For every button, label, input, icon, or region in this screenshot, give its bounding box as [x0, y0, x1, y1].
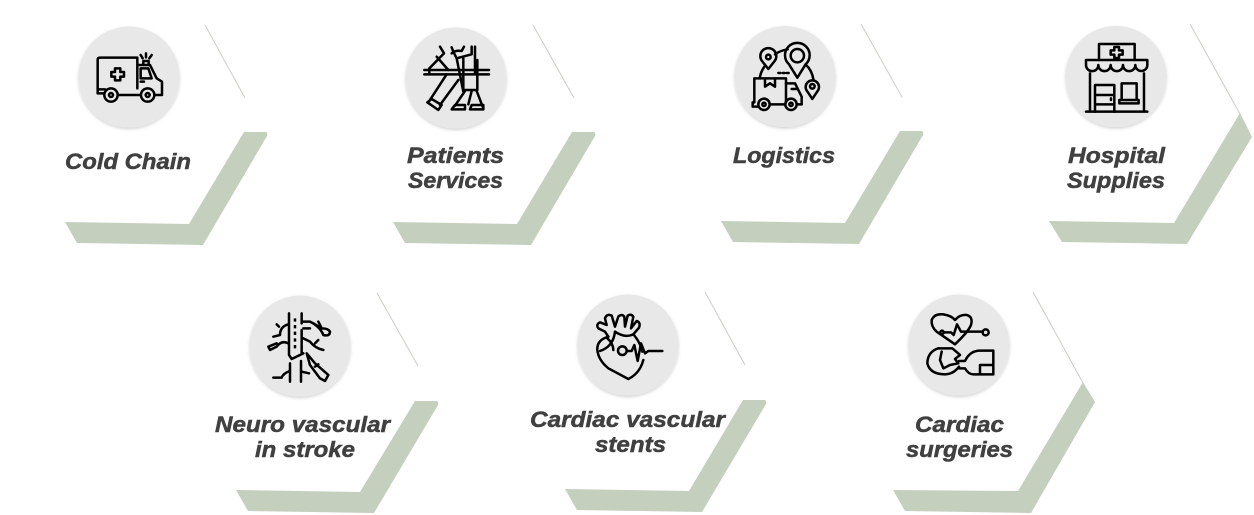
heading: hospital supplies: Supplies: [1067, 168, 1165, 193]
panel: cardiac vascular stents: [530, 292, 766, 512]
green chevron: [721, 131, 923, 244]
heading: cardiac surgeries: [906, 412, 1013, 462]
icon circle: [406, 28, 506, 128]
icon circle: [734, 26, 836, 127]
icon: heart with stent and ecg: [597, 315, 662, 379]
thin chevron line: [705, 292, 745, 365]
heading: neuro vascular in stroke: Neuro vascular: [215, 412, 392, 437]
green chevron: [65, 132, 267, 245]
heading: patients services: [407, 143, 504, 193]
heading: hospital supplies: [1067, 143, 1166, 193]
green chevron arrow: [1049, 113, 1252, 244]
icon: blood vessels and scalpel: [268, 313, 330, 382]
green chevron: [393, 132, 595, 245]
heading: cardiac surgeries: Cardiac: [915, 412, 1004, 437]
thin chevron line: [377, 293, 418, 366]
heading: neuro vascular in stroke: [215, 412, 392, 462]
panel: neuro vascular in stroke: [215, 293, 438, 513]
thin chevron line: [533, 25, 574, 98]
panel: patients services: [393, 25, 595, 245]
green chevron: [565, 400, 766, 512]
panel: logistics: [721, 24, 923, 244]
heading: logistics: Logistics: [733, 143, 835, 168]
green chevron arrow: [893, 382, 1095, 513]
heading: patients services: Services: [408, 168, 503, 193]
icon: delivery truck with map pins: [753, 43, 819, 110]
thin chevron line: [205, 25, 245, 98]
heading: neuro vascular in stroke: in stroke: [255, 437, 355, 462]
heading: cardiac vascular stents: stents: [595, 432, 666, 457]
heading: cardiac surgeries: surgeries: [906, 437, 1013, 462]
icon: hospital shop: [1086, 44, 1147, 112]
thin chevron line: [861, 24, 902, 97]
icon circle: [250, 296, 350, 396]
icon circle: [908, 294, 1010, 396]
heading: cold chain: Cold Chain: [65, 149, 191, 174]
heading: cardiac vascular stents: Cardiac vascular: [530, 407, 727, 432]
panel: cold chain: [65, 25, 267, 245]
icon circle: [78, 26, 180, 128]
heading: cardiac vascular stents: [530, 407, 727, 457]
icon circle: [578, 294, 678, 396]
panel: hospital supplies: [1049, 24, 1252, 244]
icon circle: [1066, 26, 1166, 127]
icon: patients walking: [424, 47, 489, 110]
thin chevron line: [1190, 24, 1240, 114]
thin chevron line: [1033, 292, 1083, 383]
icon: ambulance: [98, 53, 162, 102]
heading: patients services: Patients: [407, 143, 504, 168]
heading: hospital supplies: Hospital: [1068, 143, 1166, 168]
icon: heart monitor and patient: [927, 314, 993, 374]
panel: cardiac surgeries: [893, 292, 1095, 513]
green chevron: [236, 401, 438, 513]
